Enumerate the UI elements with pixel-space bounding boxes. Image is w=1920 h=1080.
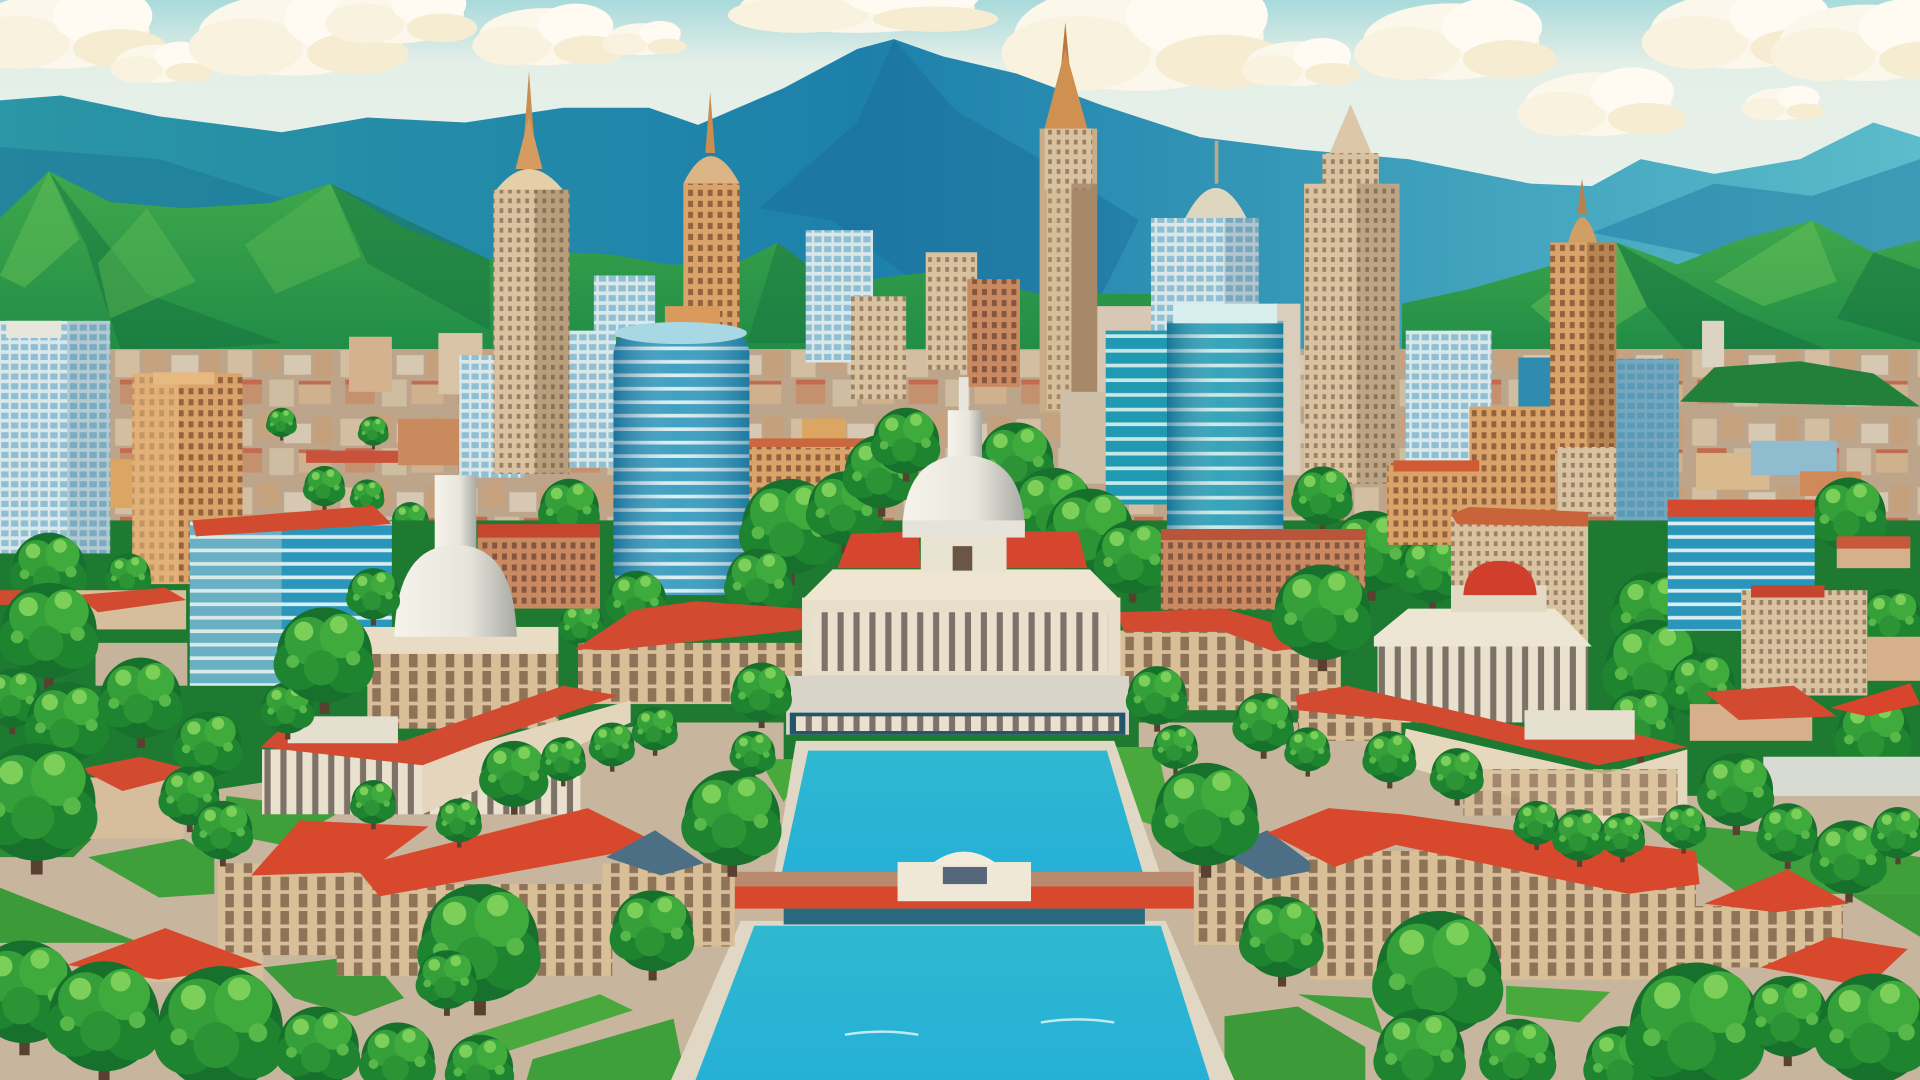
spire tower left (493, 71, 569, 474)
clouds (0, 0, 1920, 136)
spire tower centre (1040, 22, 1109, 484)
central capitol building (576, 377, 1341, 735)
pool upper (774, 741, 1161, 876)
mid-ground buildings (0, 460, 1920, 824)
small left red-roof building (67, 928, 263, 982)
ground and paths (0, 722, 1920, 1080)
white towers behind spire (459, 276, 655, 478)
green backdrop behind the campus (0, 520, 1920, 796)
tall skyscraper right (1304, 104, 1400, 484)
green mountains left (0, 171, 1151, 367)
mid distance towers centre (806, 230, 1020, 399)
mid-ground trees behind campus (10, 408, 1920, 780)
lower right hall (1194, 808, 1908, 987)
bridge (735, 852, 1194, 924)
spire tower right (1550, 179, 1621, 514)
distant city band (0, 304, 1920, 582)
blue cylinder tower left (613, 322, 749, 595)
capitol main hall (786, 531, 1129, 735)
campus trees (0, 564, 1920, 902)
teal cylinder tower (1167, 304, 1283, 536)
small left pavilion (80, 757, 198, 839)
blue block far right (1616, 359, 1679, 520)
right domed building (1296, 561, 1687, 823)
tan annex (749, 419, 882, 497)
tan block right (1469, 407, 1555, 511)
pool lower (671, 921, 1234, 1080)
capitol wings (576, 601, 1341, 710)
spire tower second (665, 92, 740, 337)
capitol dome (902, 377, 1025, 573)
glass block right (1406, 331, 1553, 463)
far blue mountains (0, 39, 1920, 380)
lower left hall (218, 808, 735, 976)
sky (0, 0, 1920, 392)
domed glass tower (1151, 141, 1259, 331)
green mountains right (1402, 220, 1920, 361)
left domed building (261, 475, 631, 814)
glass tower far left (0, 321, 110, 553)
tan tower left (132, 372, 242, 584)
bridge pavilion (898, 852, 1031, 901)
foreground trees (0, 884, 1920, 1080)
glass block beside cylinder (1106, 331, 1167, 504)
